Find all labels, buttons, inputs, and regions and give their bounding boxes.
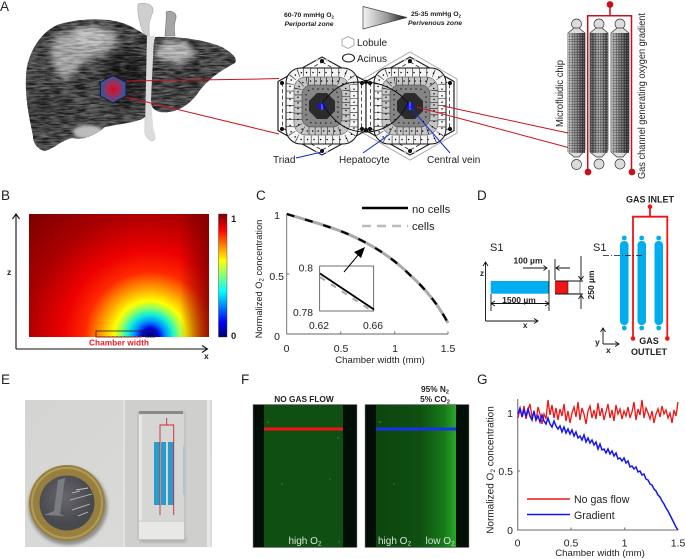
fluorescence image: gas gradient: 5% CO: [420, 394, 447, 404]
fluorescence image: no gas flow: high O: [288, 536, 318, 547]
line chart: measured concentration: [486, 399, 685, 559]
channel layout schematic: x: [606, 345, 611, 355]
line chart: concentration without gas flow model: concentration: [254, 220, 264, 278]
cross section schematic: 250 µm: [586, 270, 596, 300]
lobule labels and leaders: Central vein: [427, 155, 480, 166]
lobule labels and leaders: Hepatocyte: [339, 155, 390, 166]
fluorescence image: gas gradient: low O: [426, 536, 451, 547]
hexagon lobule marker on liver: [100, 76, 126, 103]
fluorescence image: no gas flow: [253, 394, 357, 548]
inset plot: 0.62: [309, 321, 329, 332]
line chart: measured concentration: Normalized O: [486, 473, 496, 534]
inset plot: [293, 264, 383, 332]
colour bar: [218, 214, 237, 342]
axes for heat map: [7, 214, 209, 361]
line chart: measured concentration: concentration: [486, 406, 496, 469]
oxygen zonation legend: [284, 6, 462, 29]
line chart: concentration without gas flow model: [254, 210, 455, 366]
chamber width label: Chamber width: [89, 338, 149, 348]
zoom lines from lobule to chip: [417, 106, 585, 152]
arrow from inset to curve: [344, 247, 365, 272]
line chart: measured concentration: 1: [507, 408, 513, 420]
line chart: measured concentration: 0: [507, 525, 513, 537]
lobule labels and leaders: [273, 107, 480, 166]
oxygen zonation legend: Periportal zone: [284, 21, 334, 28]
cross section schematic: S1: [490, 242, 503, 254]
inset plot: 0.8: [299, 264, 313, 274]
panel letter F: F: [241, 372, 249, 387]
panel letter C: C: [256, 188, 266, 203]
channel layout schematic: [593, 194, 674, 357]
lobule labels and leaders: Triad: [273, 155, 295, 166]
chip labels: [555, 13, 648, 179]
panel letter D: D: [477, 188, 487, 203]
channel layout schematic: GAS INLET: [626, 194, 674, 204]
cross section schematic: [480, 242, 596, 330]
liver illustration: [20, 3, 245, 155]
legend for chart C: [362, 204, 451, 233]
colour bar: 0: [231, 331, 236, 342]
inset plot: 0.66: [363, 321, 383, 332]
line chart: concentration without gas flow model: 0.5: [269, 271, 284, 283]
zoom lines from liver to lobule: [126, 78, 279, 134]
gradient trace: [518, 408, 678, 530]
line chart: concentration without gas flow model: 0: [274, 331, 280, 343]
cross section schematic: 100 µm: [514, 256, 543, 266]
axes for heat map: x: [204, 351, 209, 361]
fluorescence image: gas gradient: 2: [446, 390, 449, 396]
panel letter G: G: [477, 372, 488, 387]
liver lobules diagram: [278, 52, 457, 160]
channel layout schematic: OUTLET: [631, 347, 667, 357]
inset plot: 0.78: [293, 308, 313, 319]
lobule and acinus key: [342, 36, 387, 65]
chip labels: Microfluidic chip: [555, 60, 566, 127]
line chart: measured concentration: 2: [490, 469, 497, 473]
fluorescence image: gas gradient: high O: [378, 536, 407, 547]
line chart: measured concentration: 1: [622, 538, 628, 550]
panel letter B: B: [1, 188, 10, 203]
line chart: measured concentration: 0.5: [564, 538, 578, 550]
line chart: measured concentration: 0: [515, 538, 521, 550]
oxygen zonation legend: 60-70 mmHg O: [284, 12, 332, 19]
line chart: concentration without gas flow model: 0: [284, 343, 290, 355]
lobule and acinus key: Lobule: [357, 38, 387, 49]
fluorescence image: gas gradient: [365, 384, 469, 548]
line chart: concentration without gas flow model: 1: [274, 210, 280, 222]
fluorescence image: no gas flow: NO GAS FLOW: [274, 394, 334, 404]
legend for chart C: no cells: [412, 204, 451, 216]
oxygen zonation legend: 2: [459, 14, 462, 18]
line chart: measured concentration: 0.5: [498, 466, 513, 478]
line chart: measured concentration: Chamber width (mm): [555, 548, 645, 559]
cross section schematic: x: [523, 321, 528, 330]
photograph of coin and chip: [25, 400, 212, 547]
channel layout schematic: y: [595, 337, 600, 347]
legend for chart G: Gradient: [574, 510, 615, 522]
heat map: [29, 214, 209, 337]
panel letter E: E: [1, 372, 10, 387]
line chart: concentration without gas flow model: 0.5: [334, 343, 348, 355]
line chart: concentration without gas flow model: 2: [260, 277, 266, 281]
cross section schematic: 1500 µm: [502, 295, 536, 305]
oxygen zonation legend: 25-35 mmHg O: [411, 11, 459, 18]
fluorescence image: gas gradient: 2: [447, 400, 450, 406]
colour bar: 1: [231, 214, 237, 225]
fluorescence image: no gas flow: 2: [318, 540, 322, 548]
microfluidic chip: [568, 19, 629, 170]
line chart: measured concentration: 1.5: [671, 538, 685, 550]
oxygen zonation legend: Perivenous zone: [408, 20, 462, 27]
channel layout schematic: S1: [593, 242, 606, 254]
fluorescence image: gas gradient: 95% N: [421, 384, 446, 394]
line chart: concentration without gas flow model: Normalized O: [254, 281, 264, 338]
channel layout schematic: GAS: [639, 336, 659, 346]
fluorescence image: gas gradient: 2: [407, 540, 411, 548]
cross section schematic: z: [480, 269, 484, 278]
gas channel in red: [585, 1, 635, 175]
axes for heat map: z: [7, 267, 11, 277]
legend for chart G: [527, 494, 630, 522]
legend for chart G: No gas flow: [574, 494, 630, 506]
line chart: concentration without gas flow model: 1.5: [441, 343, 455, 355]
chip labels: Gas channel generating oxygen gradient: [637, 13, 648, 179]
lobule and acinus key: Acinus: [357, 54, 387, 65]
legend for chart C: cells: [412, 221, 435, 233]
line chart: concentration without gas flow model: 1: [392, 343, 398, 355]
oxygen zonation legend: 2: [332, 14, 335, 20]
no gas flow trace: [518, 400, 678, 424]
fluorescence image: gas gradient: 2: [451, 540, 455, 548]
line chart: concentration without gas flow model: Chamber width (mm): [335, 355, 425, 366]
